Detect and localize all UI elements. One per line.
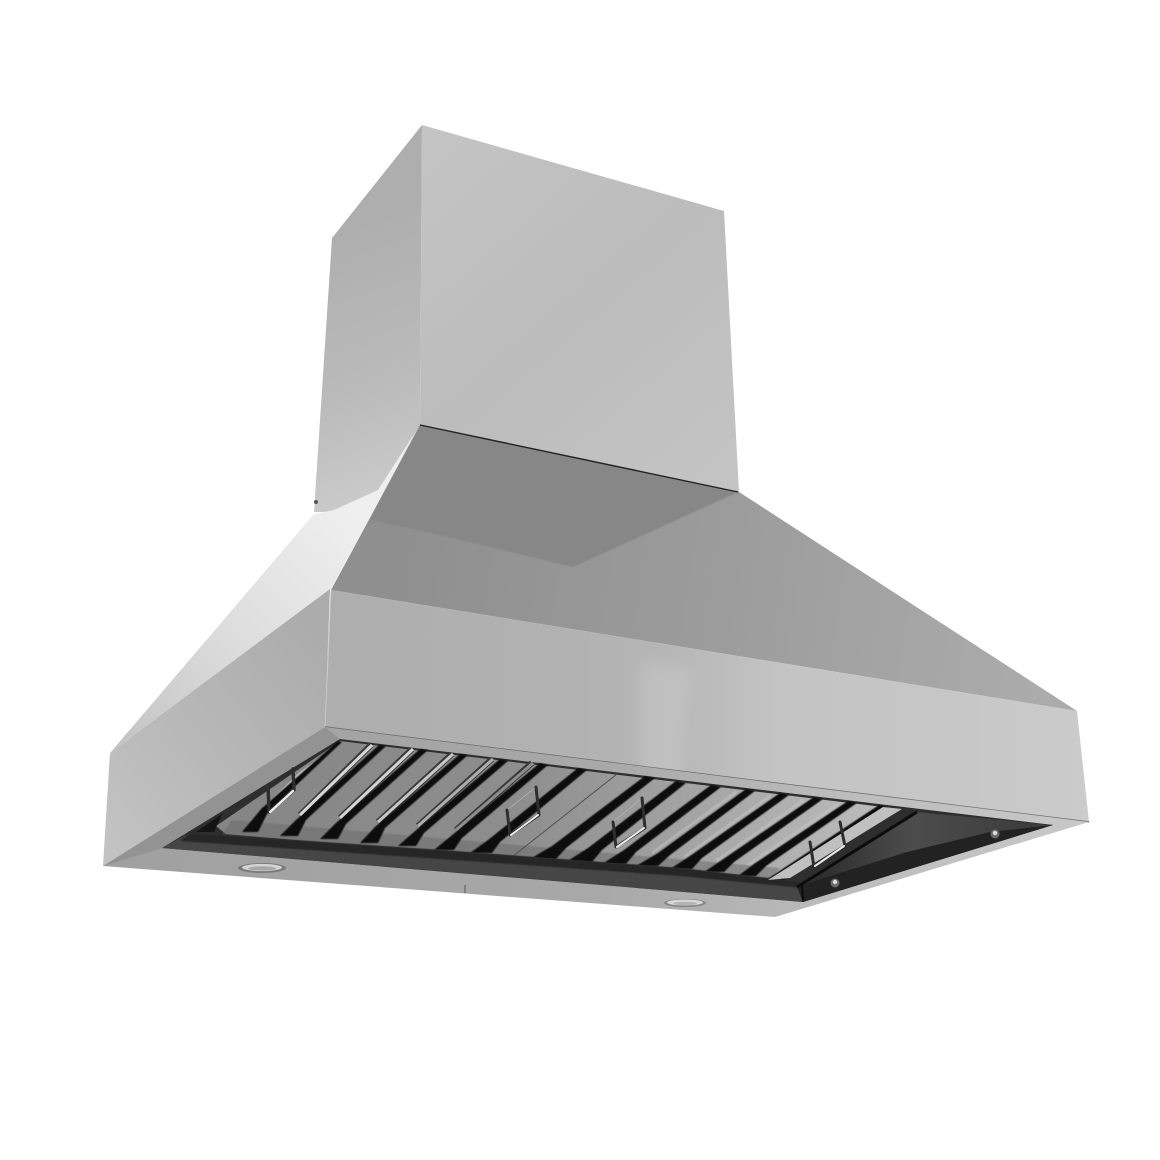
icon: screw right bbox=[990, 830, 1000, 838]
baffle filters bbox=[216, 741, 900, 880]
panel: hood left slope bbox=[110, 425, 420, 753]
left lit end piece bbox=[262, 745, 336, 808]
baffle divider bbox=[512, 774, 617, 857]
icon: baffle handle 3 bbox=[613, 798, 645, 847]
panel: hood front band bbox=[325, 590, 1089, 822]
band corner highlight bbox=[325, 590, 331, 727]
seam notch on front rim bbox=[464, 885, 466, 893]
opening background bbox=[162, 739, 1053, 902]
baffle light strips bbox=[300, 745, 533, 830]
right end panel bbox=[768, 807, 1053, 902]
panel: duct cover left face bbox=[314, 125, 422, 512]
left rim shade bbox=[103, 727, 340, 866]
band lower edge line bbox=[325, 727, 1089, 822]
duct shadow line bbox=[420, 425, 738, 492]
panel: hood underside rim bbox=[103, 727, 1089, 917]
icon: screw left bbox=[830, 878, 840, 888]
panel: hood front slope bbox=[331, 425, 1077, 711]
baffle sheen on right side bbox=[652, 792, 838, 865]
baffle gap shadows beside light strips bbox=[300, 745, 532, 830]
shadow cast by duct on slope bbox=[370, 425, 738, 567]
left black notch bbox=[196, 814, 222, 832]
baffle gaps bbox=[242, 741, 887, 880]
icon: hood light left bbox=[238, 863, 286, 873]
panel: hood left side face bbox=[103, 589, 330, 866]
channel upper lip bbox=[180, 833, 802, 888]
last baffle bbox=[768, 807, 902, 880]
panel: baffle filter opening bbox=[162, 739, 1053, 902]
icon: baffle handle 1 bbox=[268, 769, 294, 812]
icon: duct mounting screw bbox=[314, 500, 318, 504]
band highlight bbox=[640, 660, 690, 790]
icon: baffle handle 2 bbox=[507, 787, 539, 835]
front grease channel bbox=[162, 833, 803, 902]
icon: baffle handle 4 bbox=[810, 822, 845, 867]
icon: hood light right bbox=[664, 899, 706, 907]
panel: duct cover front face bbox=[420, 125, 739, 492]
baffle tip shade bbox=[222, 820, 780, 880]
